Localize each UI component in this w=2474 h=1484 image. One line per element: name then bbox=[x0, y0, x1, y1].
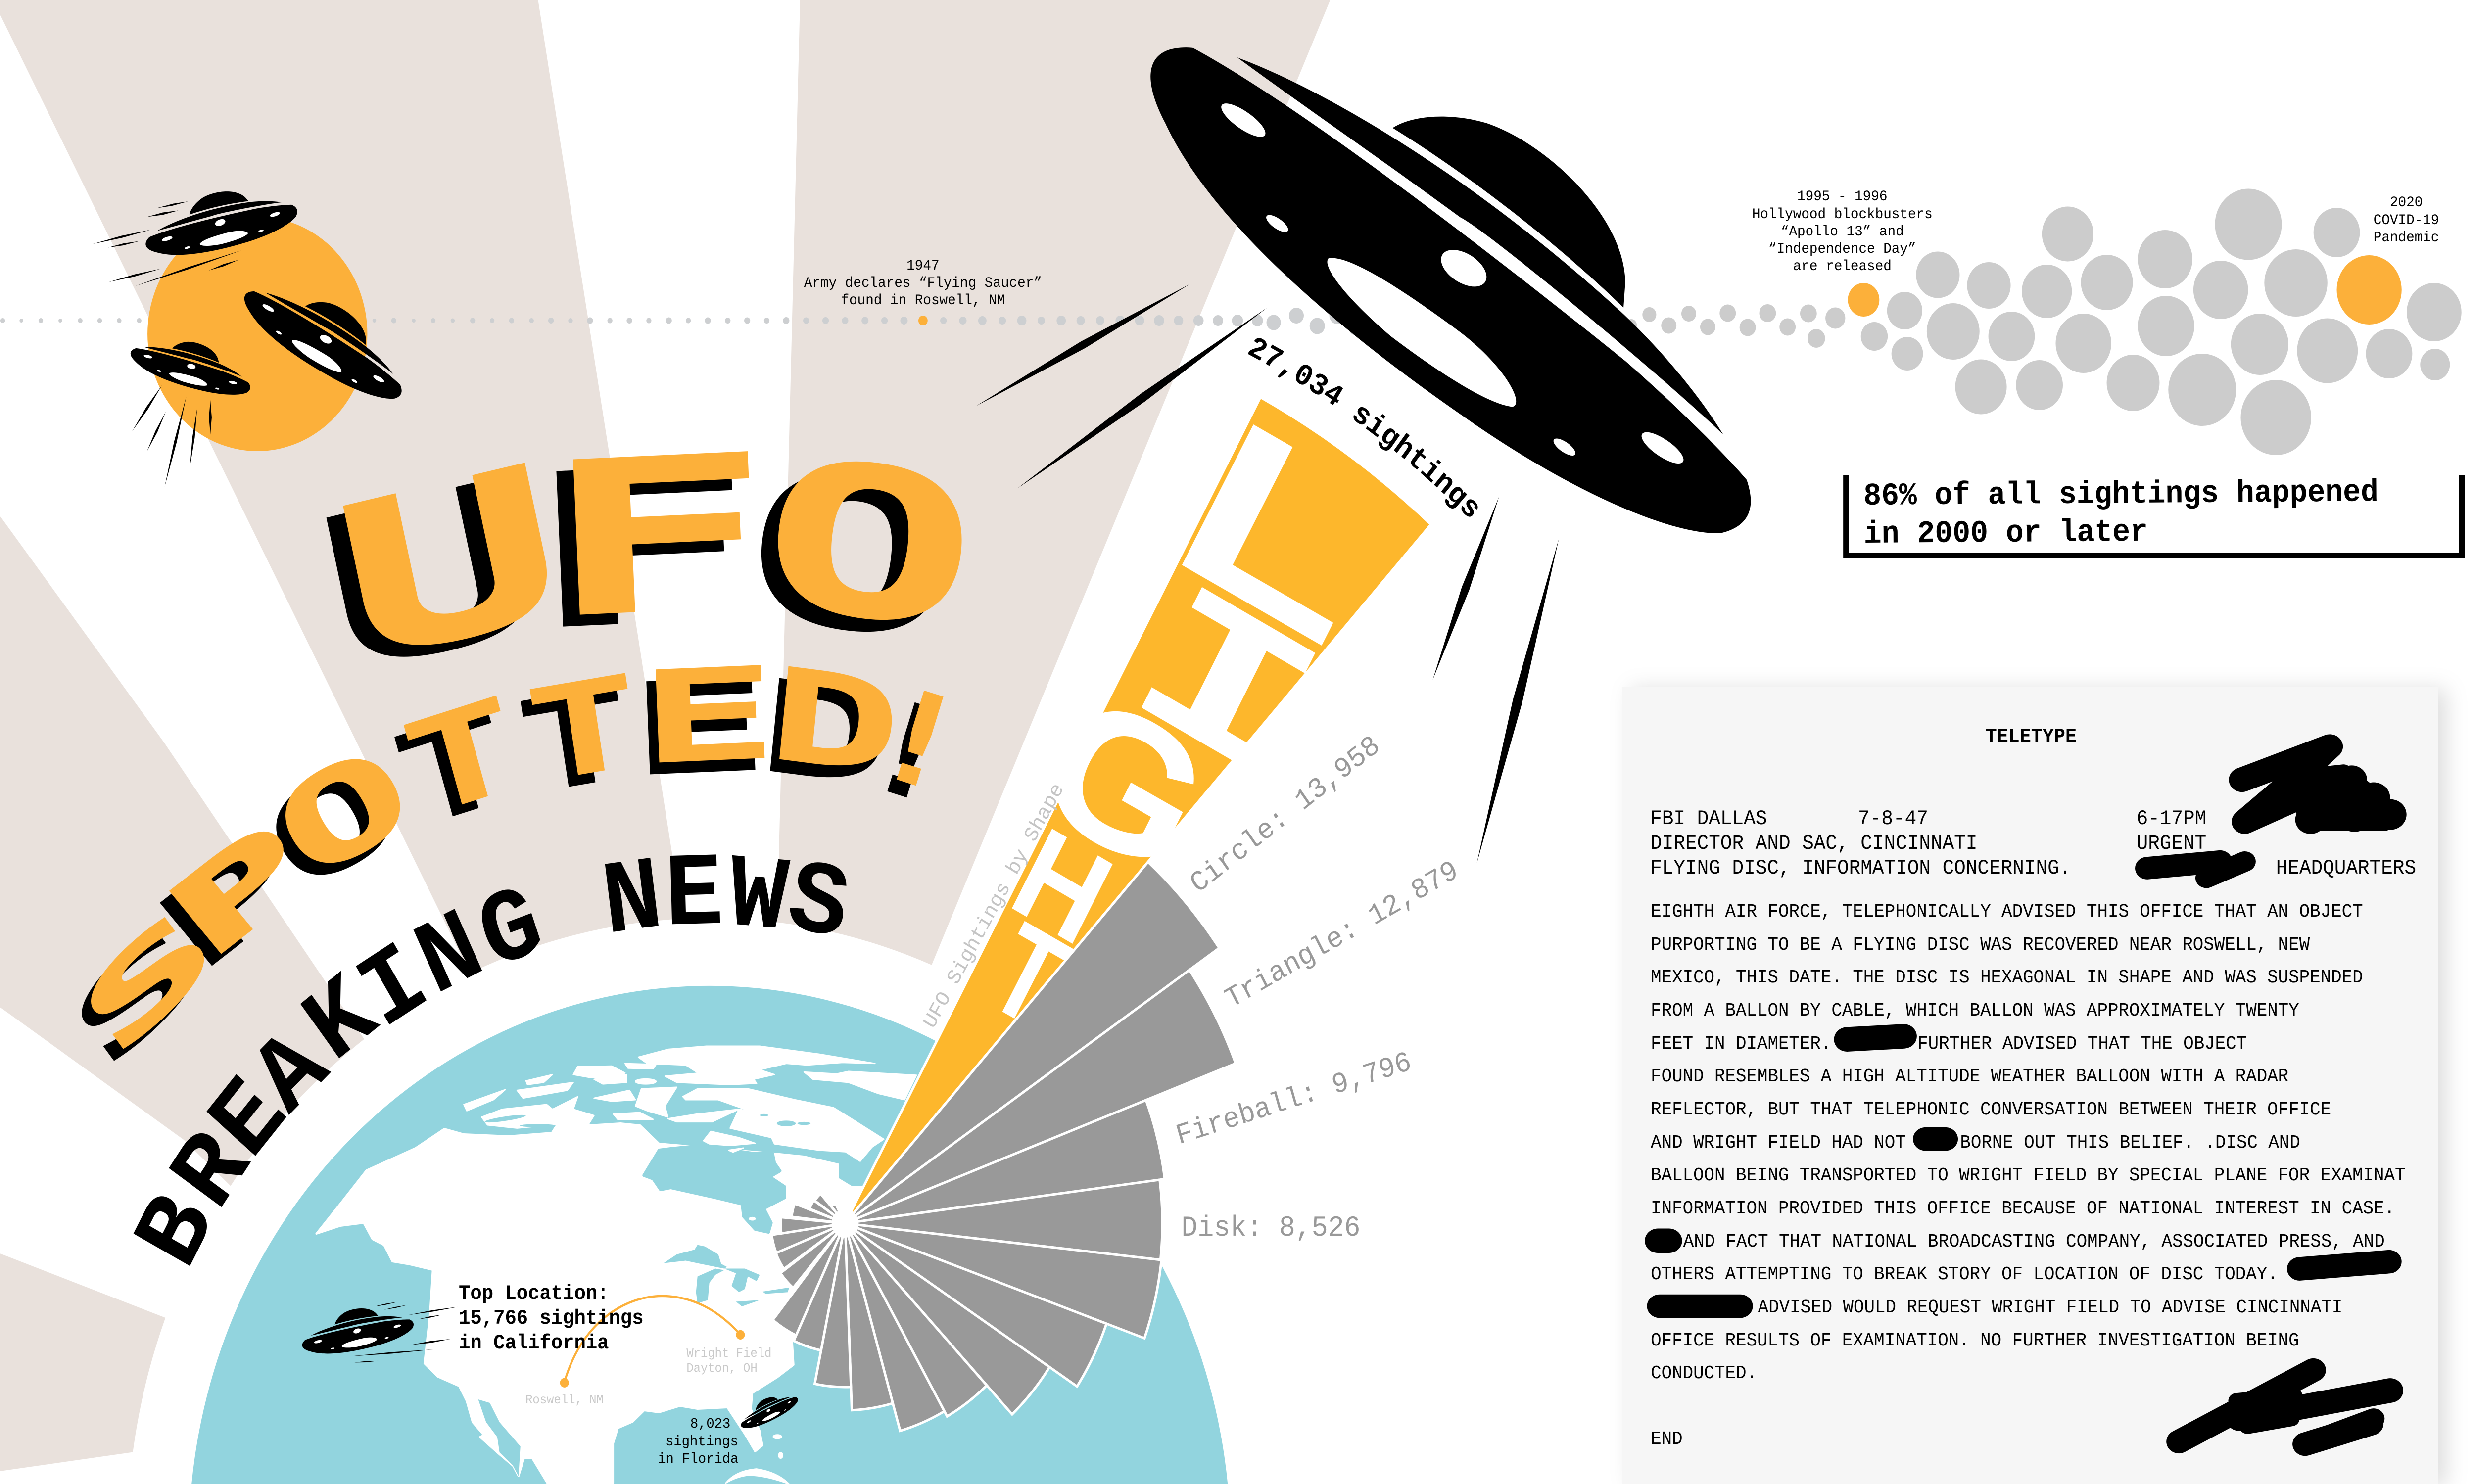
yellow beam wedge: Light, 27,034 sightings bbox=[845, 397, 1442, 1328]
beam letters: LIGHT bbox=[970, 370, 1424, 1055]
beam letters: LIGHT: H bbox=[993, 800, 1132, 973]
title: SPOTTED!: T bbox=[518, 647, 652, 812]
title: UFO: U bbox=[299, 429, 570, 723]
title: SPOTTED!: O bbox=[250, 719, 437, 907]
title: UFO: F bbox=[537, 408, 779, 667]
title: BREAKING NEWS: E bbox=[190, 1058, 312, 1182]
label: 27,034 sightings: 27,034 sightings bbox=[1248, 338, 1478, 517]
annotation: 1995-1996 blockbusters: are released bbox=[1793, 258, 1892, 275]
label: UFO Sightings by Shape: UFO Sightings by Shape bbox=[919, 780, 1069, 1033]
title: SPOTTED!: S bbox=[62, 885, 235, 1079]
chart labels: shapes: Disk: 8,526 bbox=[1182, 1212, 1360, 1245]
callout: Top Location California bbox=[459, 1283, 644, 1355]
title: BREAKING NEWS: B bbox=[116, 1177, 240, 1287]
callout: Florida sightings bbox=[658, 1416, 738, 1467]
panel: FBI teletype document: TELETYPE bbox=[1986, 725, 2077, 748]
panel: FBI teletype document: OFFICE RESULTS OF EXAMINATION. NO FURTHER INVESTIGATION BEING bbox=[1651, 1330, 2299, 1351]
annotation: 2020 pandemic: Pandemic bbox=[2374, 229, 2439, 246]
small UFO fleet with speed lines bbox=[93, 143, 402, 487]
map label: Wright Field, Dayton bbox=[686, 1346, 771, 1376]
annotation: 1947 Flying Saucer bbox=[804, 257, 1042, 309]
title: BREAKING NEWS: E bbox=[664, 837, 725, 956]
panel: FBI teletype document: PURPORTING TO BE A FLYING DISC WAS RECOVERED NEAR ROSWELL, NEW bbox=[1651, 934, 2310, 956]
bubble marker: 1995-1996 bbox=[1848, 283, 1879, 317]
title: SPOTTED!: E bbox=[626, 651, 772, 805]
annotation: 2020 pandemic: 2020 bbox=[2390, 194, 2423, 211]
panel: FBI teletype document: FEET IN DIAMETER. bbox=[1651, 1033, 1831, 1055]
title: BREAKING NEWS: S bbox=[780, 841, 857, 968]
panel: FBI teletype document: FBI DALLAS bbox=[1650, 807, 1767, 831]
annotation: 1995-1996 blockbusters: “Apollo 13” and bbox=[1781, 223, 1904, 240]
panel: FBI teletype document: CONDUCTED. bbox=[1651, 1363, 1757, 1384]
annotation: 1947 Flying Saucer: 1947 bbox=[906, 257, 940, 274]
title: UFO: O bbox=[732, 422, 973, 690]
panel: FBI teletype document: AND WRIGHT FIELD HAD NOT bbox=[1651, 1132, 1906, 1154]
icon: UFO over California with speed lines bbox=[300, 1273, 458, 1397]
callout: Florida sightings: sightings bbox=[666, 1434, 738, 1450]
title: SPOTTED!: D bbox=[753, 651, 899, 817]
annotation: 1995-1996 blockbusters bbox=[1752, 188, 1933, 275]
icon: orange sun bbox=[147, 217, 367, 451]
panel: FBI teletype document: FOUND RESEMBLES A HIGH ALTITUDE WEATHER BALLOON WITH A RADAR bbox=[1651, 1066, 2288, 1087]
title: BREAKING NEWS: N bbox=[401, 890, 501, 1023]
icon: UFO over Florida bbox=[740, 1379, 799, 1446]
beam letters: LIGHT: L bbox=[1142, 370, 1424, 694]
globe with North America map bbox=[191, 986, 1228, 1484]
title: BREAKING NEWS: A bbox=[233, 1010, 352, 1138]
timeline marker: 1947 bbox=[918, 316, 928, 325]
callout: Top Location California: in California bbox=[459, 1332, 609, 1355]
title: SPOTTED!: E bbox=[636, 639, 781, 793]
chart labels: shapes: Circle: 13,958 bbox=[1185, 730, 1386, 901]
panel: FBI teletype document: REFLECTOR, BUT THAT TELEPHONIC CONVERSATION BETWEEN THEIR OFFICE bbox=[1651, 1099, 2331, 1120]
white halo around globe bbox=[130, 918, 1290, 1484]
map label: Roswell, NM: Roswell, NM bbox=[525, 1393, 604, 1407]
chart labels: shapes: Fireball: 9,796 bbox=[1173, 1046, 1415, 1153]
title: BREAKING NEWS: W bbox=[725, 838, 792, 960]
panel: FBI teletype document: BORNE OUT THIS BELIEF. .DISC AND bbox=[1960, 1132, 2300, 1154]
beam letters: LIGHT: T bbox=[970, 896, 1088, 1055]
panel: FBI teletype document: INFORMATION PROVIDED THIS OFFICE BECAUSE OF NATIONAL INTEREST IN CASE. bbox=[1651, 1198, 2395, 1219]
radial bar chart: sightings by shape bbox=[770, 862, 1245, 1436]
title: BREAKING NEWS: N bbox=[597, 839, 668, 964]
panel: FBI teletype document: ADVISED WOULD REQUEST WRIGHT FIELD TO ADVISE CINCINNATI bbox=[1758, 1297, 2342, 1318]
panel: FBI teletype document: END bbox=[1651, 1429, 1683, 1450]
map label: Wright Field, Dayton: Dayton, OH bbox=[686, 1361, 758, 1376]
title: SPOTTED!: S bbox=[53, 897, 225, 1091]
title: UFO: F bbox=[521, 420, 762, 679]
panel: FBI teletype document: MEXICO, THIS DATE. THE DISC IS HEXAGONAL IN SHAPE AND WAS SUSPENDED bbox=[1651, 967, 2363, 988]
panel: FBI teletype document: FURTHER ADVISED THAT THE OBJECT bbox=[1917, 1033, 2247, 1055]
title: SPOTTED! bbox=[53, 639, 986, 1091]
callout: Florida sightings: 8,023 bbox=[690, 1416, 730, 1432]
annotation: 2020 pandemic: COVID-19 bbox=[2374, 212, 2439, 229]
annotation: 1995-1996 blockbusters: Hollywood blockbusters bbox=[1752, 206, 1933, 223]
title: SPOTTED!: O bbox=[241, 731, 428, 919]
annotation: 1995-1996 blockbusters: 1995 - 1996 bbox=[1797, 188, 1888, 205]
panel: FBI teletype document: BALLOON BEING TRANSPORTED TO WRIGHT FIELD BY SPECIAL PLANE FOR EXAMINAT bbox=[1651, 1165, 2406, 1186]
panel: FBI teletype document: FROM A BALLON BY CABLE, WHICH BALLON WAS APPROXIMATELY TWENTY bbox=[1651, 1000, 2299, 1021]
large UFO with beam speed lines bbox=[976, 47, 1751, 863]
title: BREAKING NEWS: G bbox=[466, 866, 557, 997]
title: BREAKING NEWS: I bbox=[341, 923, 448, 1056]
title: SPOTTED!: T bbox=[380, 680, 528, 859]
panel: FBI teletype document: FLYING DISC, INFORMATION CONCERNING. bbox=[1650, 857, 2071, 880]
title: SPOTTED!: P bbox=[145, 799, 335, 981]
bubble marker: 2020 bbox=[2337, 255, 2402, 325]
map label: Wright Field, Dayton: Wright Field bbox=[686, 1346, 771, 1361]
annotation: 1995-1996 blockbusters: “Independence Day” bbox=[1768, 240, 1916, 257]
panel: FBI teletype document: 7-8-47 bbox=[1858, 807, 1928, 831]
title: SPOTTED!: T bbox=[389, 668, 537, 847]
panel: FBI teletype document: DIRECTOR AND SAC, CINCINNATI bbox=[1650, 832, 1977, 855]
title: SPOTTED!: ! bbox=[853, 655, 986, 826]
title: UFO: U bbox=[315, 417, 586, 711]
annotation: 1947 Flying Saucer: found in Roswell, NM bbox=[841, 292, 1005, 309]
panel: FBI teletype document: URGENT bbox=[2137, 832, 2206, 855]
chart labels: shapes bbox=[1173, 730, 1464, 1245]
callout: 86% of sightings bbox=[1846, 475, 2462, 556]
title: SPOTTED!: P bbox=[136, 811, 326, 993]
timeline dots 1900 to 1990s bbox=[0, 307, 1364, 335]
panel: FBI teletype document: OTHERS ATTEMPTING TO BREAK STORY OF LOCATION OF DISC TODAY. bbox=[1651, 1264, 2278, 1285]
title: UFO bbox=[299, 408, 990, 723]
title: SPOTTED!: D bbox=[761, 639, 908, 805]
callout: Top Location California: 15,766 sightings bbox=[459, 1307, 644, 1330]
callout: 86% of sightings: 86% of all sightings happened bbox=[1863, 475, 2379, 514]
panel: FBI teletype document bbox=[1622, 687, 2438, 1484]
title: BREAKING NEWS bbox=[116, 837, 857, 1287]
callout: Top Location California: Top Location: bbox=[459, 1283, 609, 1305]
title: BREAKING NEWS: R bbox=[152, 1113, 276, 1231]
annotation: 1947 Flying Saucer: Army declares “Flying Saucer” bbox=[804, 275, 1042, 291]
route arc: Roswell to Wright Field bbox=[560, 1296, 745, 1388]
beam letters: LIGHT: G bbox=[1010, 650, 1239, 916]
title: UFO: O bbox=[749, 411, 990, 678]
title: SPOTTED!: ! bbox=[844, 667, 977, 837]
beam letters: LIGHT: I bbox=[1094, 545, 1350, 840]
background sunburst rays bbox=[0, 0, 1330, 1471]
callout: 86% of sightings: in 2000 or later bbox=[1864, 514, 2148, 553]
bubble cluster: sightings per year 1990s to 2020s bbox=[1626, 189, 2462, 455]
title: SPOTTED!: T bbox=[509, 658, 642, 824]
panel: FBI teletype document: HEADQUARTERS bbox=[2276, 857, 2416, 880]
annotation: 2020 pandemic bbox=[2374, 194, 2439, 246]
callout: Florida sightings: in Florida bbox=[658, 1451, 738, 1467]
panel: FBI teletype document: AND FACT THAT NATIONAL BROADCASTING COMPANY, ASSOCIATED PRESS, AND bbox=[1683, 1231, 2385, 1252]
chart labels: shapes: Triangle: 12,879 bbox=[1221, 855, 1464, 1016]
panel: FBI teletype document: EIGHTH AIR FORCE, TELEPHONICALLY ADVISED THIS OFFICE THAT AN OBJECT bbox=[1651, 901, 2363, 923]
title: BREAKING NEWS: K bbox=[285, 956, 399, 1088]
panel: FBI teletype document: 6-17PM bbox=[2137, 807, 2206, 831]
